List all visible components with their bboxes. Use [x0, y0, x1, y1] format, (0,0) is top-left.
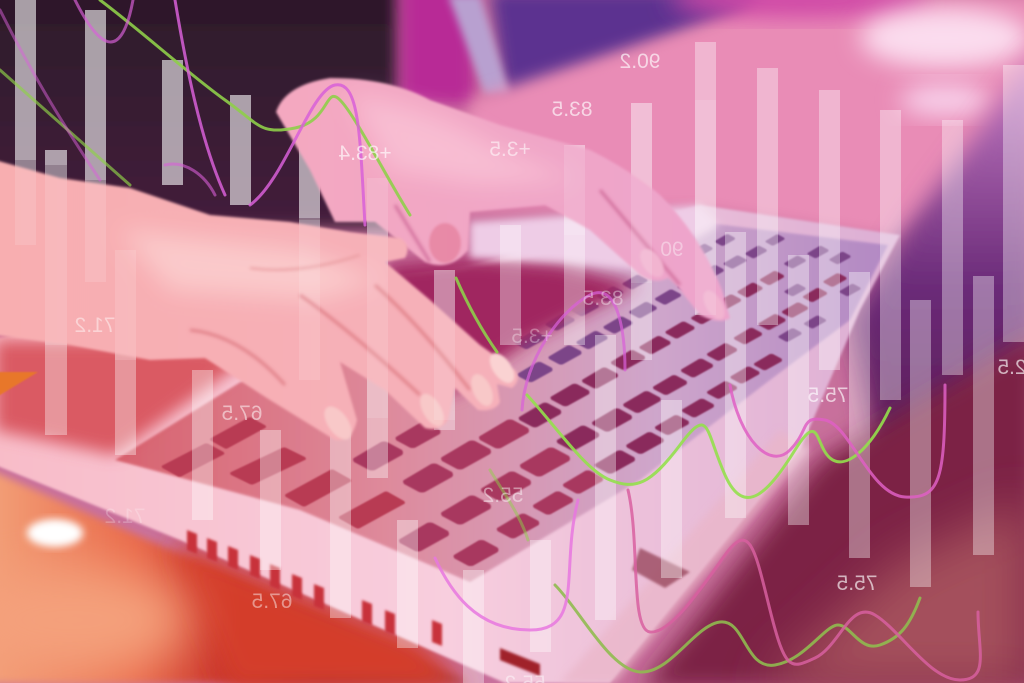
- fingernail: [635, 245, 669, 281]
- palm and back of hand: [276, 78, 730, 321]
- value: 71.2: [105, 505, 145, 528]
- purple backdrop: [490, 0, 770, 100]
- dark gap beneath hands: [385, 258, 640, 395]
- laptop screen edge: [850, 50, 1024, 480]
- value: 90: [660, 238, 684, 261]
- knuckle shade: [250, 255, 360, 270]
- fingernail: [319, 402, 357, 444]
- orange key corner: [0, 372, 38, 398]
- faint bars over hands: [15, 100, 716, 420]
- desk near: [170, 540, 470, 683]
- desk surface: [0, 470, 470, 683]
- magenta top band: [670, 0, 930, 18]
- pale palm rest band: [470, 205, 720, 270]
- right hand: [276, 78, 730, 323]
- value: 90.2: [620, 50, 660, 73]
- value: 75.5: [808, 384, 848, 407]
- finger gap: [190, 330, 285, 385]
- value: 75.5: [837, 572, 877, 595]
- glare: [27, 519, 83, 547]
- laptop deck: [0, 205, 900, 683]
- large near keys: [162, 417, 405, 528]
- keyboard keys: [162, 234, 860, 566]
- finger gap: [300, 295, 420, 395]
- laptop front lip: [560, 430, 810, 683]
- value: 83.5: [583, 287, 623, 310]
- value: 55.2: [483, 484, 523, 507]
- wood lower right: [760, 500, 1024, 683]
- pale post: [448, 0, 510, 95]
- highlight on knuckles: [120, 230, 380, 300]
- value: +83.4: [338, 142, 392, 165]
- second glow: [900, 84, 990, 116]
- laptop left keyboard edge: [0, 340, 260, 455]
- left hand: [0, 160, 519, 444]
- hand shape: [0, 160, 518, 440]
- value: +3.5: [489, 138, 531, 161]
- fingernail: [485, 349, 519, 387]
- laptop body: [0, 205, 900, 683]
- value: 83.5: [552, 98, 592, 121]
- fingernail: [467, 371, 497, 409]
- dark desk right: [640, 330, 1024, 683]
- magenta backdrop: [400, 0, 475, 105]
- value: 67.5: [252, 590, 292, 613]
- finger shade: [395, 205, 430, 262]
- desk warm patch: [0, 565, 190, 675]
- value: 71.2: [75, 314, 115, 337]
- fingernail: [699, 287, 729, 323]
- finger gap: [375, 285, 470, 390]
- side port: [500, 648, 540, 676]
- front rows: [519, 271, 846, 474]
- value: 67.5: [222, 402, 262, 425]
- mid keys: [353, 420, 603, 566]
- far rows: [514, 234, 860, 382]
- upper highlight: [350, 95, 580, 185]
- dark sweater top left: [0, 0, 400, 230]
- fingernail: [415, 390, 449, 430]
- finger shade: [600, 190, 680, 285]
- trackpad hinge mark: [632, 548, 690, 588]
- fingernail: [429, 223, 461, 263]
- pink desk: [460, 0, 1024, 240]
- top right glow: [860, 8, 1024, 68]
- brighter bars on dark area: [15, 0, 320, 218]
- value: +3.5: [511, 325, 553, 348]
- keyboard well: [115, 222, 888, 582]
- side vents: [187, 530, 442, 646]
